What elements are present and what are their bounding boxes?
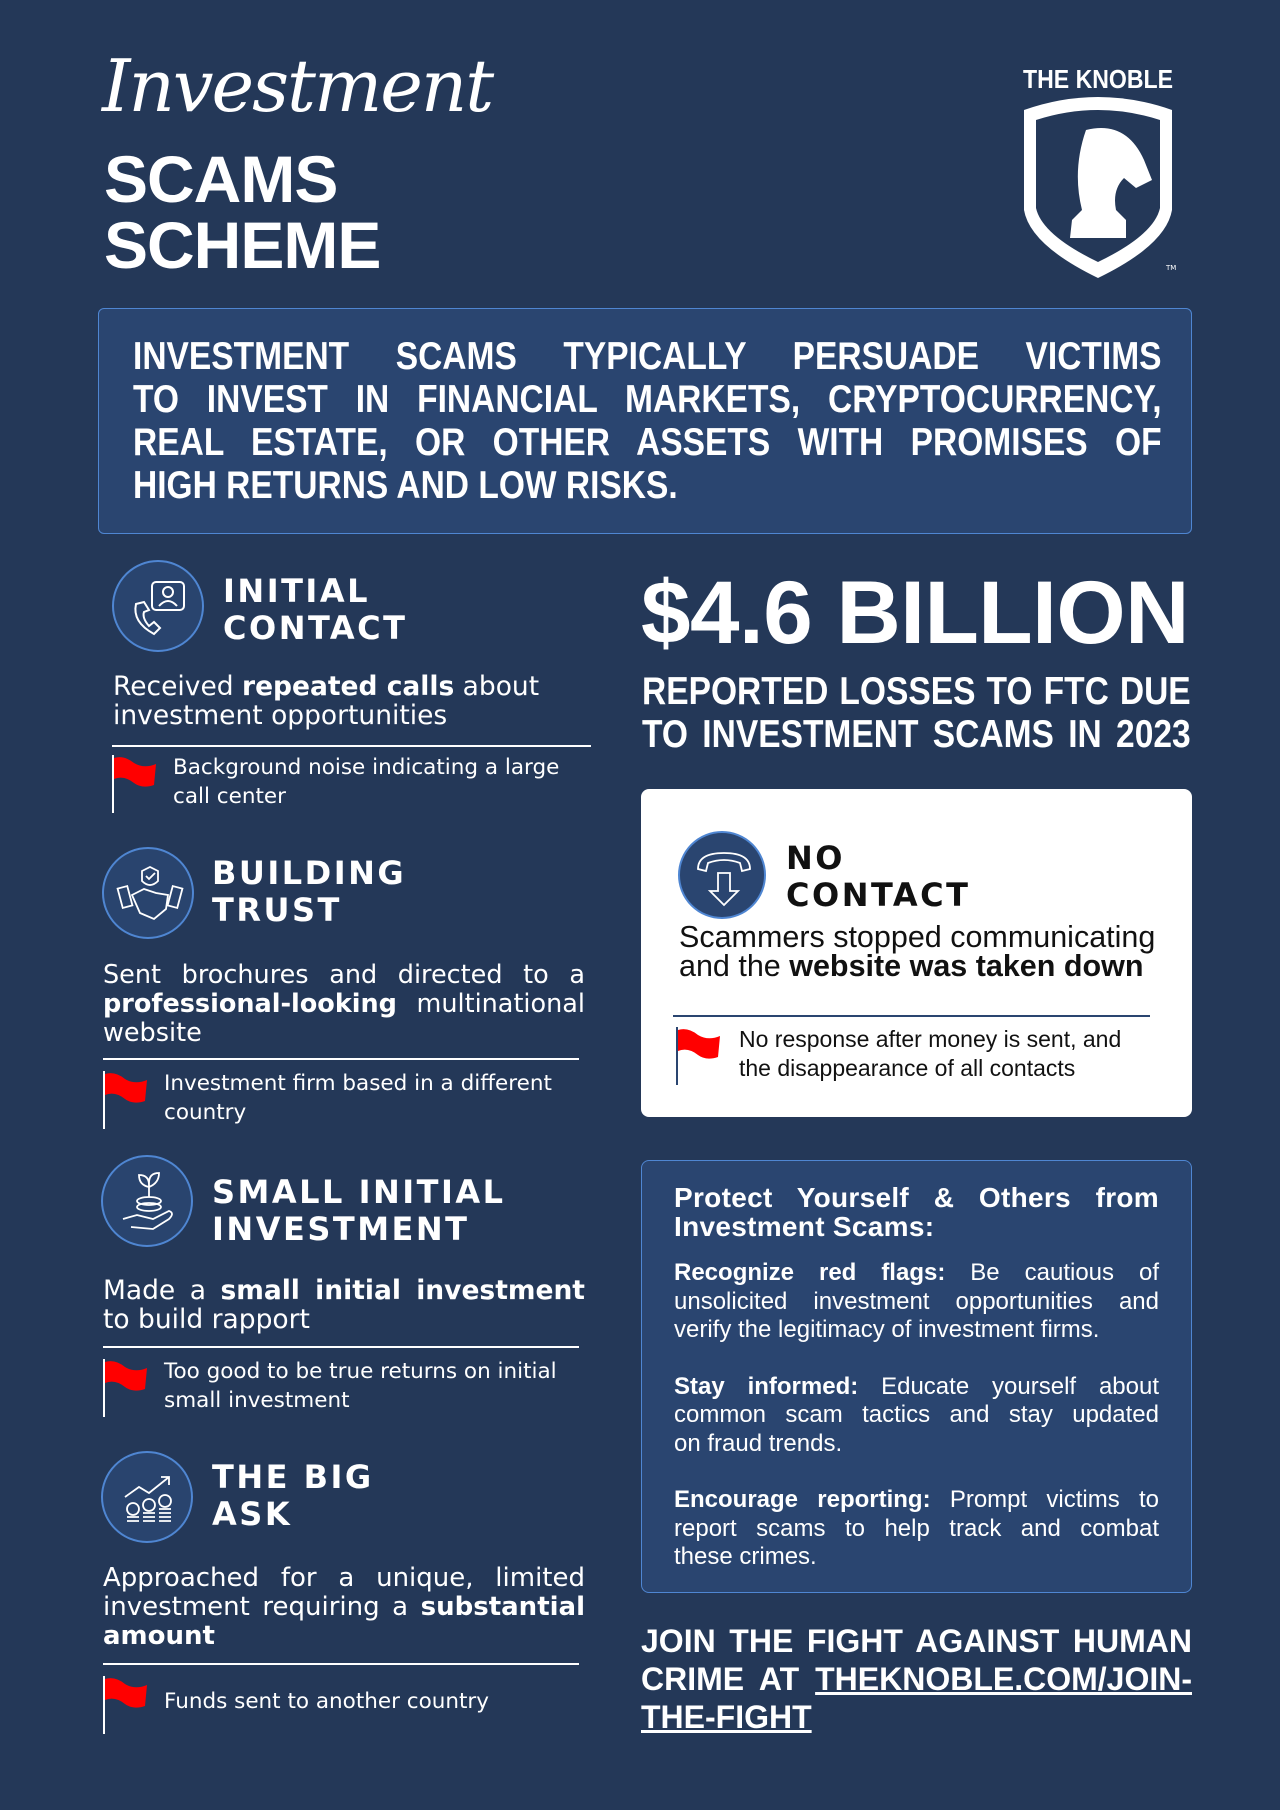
panel: protect yourself [641,1160,1192,1593]
title: SCAMS SCHEME: SCHEME [104,208,380,282]
icon: hang up phone [678,831,766,919]
icon: phone contact [112,560,204,652]
step 2: building trust [102,847,585,1129]
logo: The Knoble [1023,64,1176,278]
heading: CONTACT [786,876,970,914]
heading: INITIAL [223,572,370,610]
script title: Investment: Investment [102,44,492,128]
statistic caption: TO INVESTMENT SCAMS IN 2023 [642,713,1191,756]
body: Approached for a unique, limited investment requiring a substantial amount [103,1563,585,1651]
body: to build rapport [103,1304,310,1335]
heading: ASK [212,1495,292,1533]
red flag note [103,1346,579,1417]
red flag note: Funds sent to another country [164,1689,489,1714]
heading: CONTACT [223,609,407,647]
statistic: $4.6 billion: $4.6 BILLION [641,562,1189,662]
tip: stay informed [674,1372,1159,1456]
red flag note [112,745,591,813]
panel: no contact [641,789,1192,1117]
tip: encourage reporting: Encourage reporting: Prompt victims to [674,1486,1159,1513]
tip: recognize: unsolicited investment opportunities and [674,1288,1159,1314]
tip: encourage reporting [674,1486,1159,1570]
step 4: the big ask [101,1451,585,1734]
intro box: HIGH RETURNS AND LOW RISKS. [133,464,678,507]
tip: stay informed: on fraud trends. [674,1430,842,1456]
heading [212,854,406,929]
red flag note: Investment firm based in a different country [164,1071,552,1125]
tip: stay informed: Stay informed: Educate yourself about [674,1372,1159,1400]
intro box: TO INVEST IN FINANCIAL MARKETS, CRYPTOCURRENCY, [133,378,1162,421]
red flag note [103,1058,579,1129]
body: professional-looking multinational [103,989,585,1019]
footer call to action: THE-FIGHT [641,1699,812,1735]
body: Received repeated calls about investment opportunities [113,671,539,731]
icon: plant coins hand [101,1155,193,1247]
body: Sent brochures and directed to a [103,960,585,990]
step 1: initial contact [112,560,591,813]
intro box: REAL ESTATE, OR OTHER ASSETS WITH PROMISES OF [133,421,1162,464]
red flag note: Background noise indicating a large call center [173,755,559,809]
heading: INVESTMENT [212,1210,470,1248]
red flag note [673,1015,1150,1085]
intro box: INVESTMENT SCAMS TYPICALLY PERSUADE VICTIMS [133,335,1162,378]
footer call to action: CRIME AT THEKNOBLE.COM/JOIN- [641,1661,1192,1697]
icon: handshake [102,847,194,939]
red flag note: Too good to be true returns on initial small investment [164,1359,557,1413]
footer call to action: JOIN THE FIGHT AGAINST HUMAN [641,1623,1192,1659]
heading: Protect Yourself & Others from Investment Scams: [674,1182,1159,1242]
logo: The Knoble: TM [1165,264,1176,272]
heading [212,1173,506,1248]
heading: BUILDING [212,854,406,892]
tip: encourage reporting: these crimes. [674,1543,817,1570]
heading: SMALL INITIAL [212,1173,506,1211]
heading [212,1458,374,1533]
footer call to action [641,1623,1192,1735]
statistic caption [642,670,1191,756]
body: website [103,1018,202,1048]
step 3: small initial investment [101,1155,585,1417]
heading: NO [786,839,845,877]
title: SCAMS SCHEME: SCAMS [104,142,337,216]
heading [223,572,407,647]
body: Scammers stopped communicating [679,920,1155,954]
body [679,920,1155,983]
body [103,960,585,1048]
heading [786,839,970,914]
intro box [98,308,1192,534]
tip: encourage reporting: report scams to help track and combat [674,1514,1159,1542]
tip: recognize: Recognize red flags: Be cautious of [674,1259,1159,1286]
red flag note [103,1663,579,1734]
statistic caption: REPORTED LOSSES TO FTC DUE [642,670,1191,713]
body [103,1275,585,1335]
icon: growth coins [101,1451,193,1543]
body: Made a small initial investment [103,1275,585,1306]
heading: THE BIG [212,1458,374,1496]
tip: recognize: verify the legitimacy of investment firms. [674,1316,1099,1343]
heading: TRUST [212,891,342,929]
red flag note: No response after money is sent, and [739,1026,1121,1052]
tip: recognize [674,1259,1160,1343]
body: and the website was taken down [679,949,1144,983]
tip: stay informed: common scam tactics and stay updated [674,1401,1159,1428]
red flag note: the disappearance of all contacts [739,1055,1075,1081]
title: SCAMS SCHEME [104,142,380,282]
